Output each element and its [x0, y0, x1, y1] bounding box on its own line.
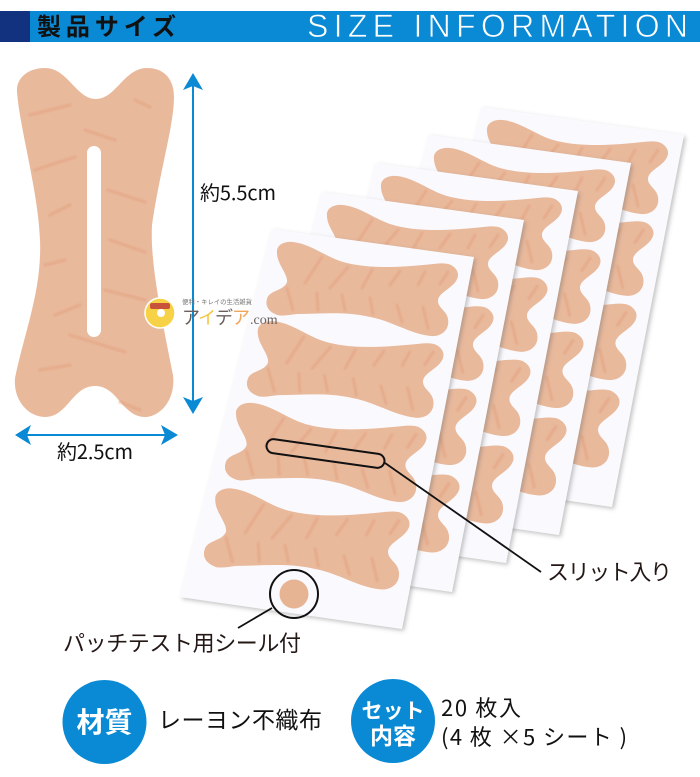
logo: アイデア	[182, 304, 250, 330]
set contents badge: セット	[362, 695, 424, 725]
patch test seal callout	[238, 570, 318, 628]
set contents text: 20 枚入	[441, 691, 521, 723]
logo: 便利・キレイの生活雑貨	[182, 297, 253, 306]
set contents text	[441, 691, 627, 752]
sheet 1 front	[180, 229, 474, 629]
slit callout	[266, 438, 541, 572]
material text: レーヨン不織布	[158, 701, 322, 735]
width arrow	[15, 425, 178, 445]
logo: .com	[250, 313, 278, 328]
set contents text: (4 枚 ×5 シート )	[441, 720, 627, 752]
logo	[145, 297, 278, 330]
sheet 5	[390, 107, 684, 507]
heading: product size: 製品サイズ	[37, 7, 176, 42]
width label: 約2.5cm	[57, 436, 133, 465]
set contents badge	[351, 679, 435, 763]
material badge: 材質	[76, 701, 133, 741]
heading: size information: SIZE INFORMATION	[307, 8, 688, 44]
sheet 4	[337, 135, 631, 535]
set contents badge: 内容	[370, 717, 416, 751]
sheet 3	[284, 163, 578, 563]
height arrow	[183, 73, 203, 414]
large patch with slit	[15, 68, 174, 417]
slit label: スリット入り	[547, 555, 672, 587]
height label: 約5.5cm	[200, 177, 276, 206]
patch test label: パッチテスト用シール付	[63, 626, 301, 658]
material badge	[62, 680, 146, 764]
header bar	[0, 7, 700, 44]
sheet 2	[230, 192, 524, 592]
